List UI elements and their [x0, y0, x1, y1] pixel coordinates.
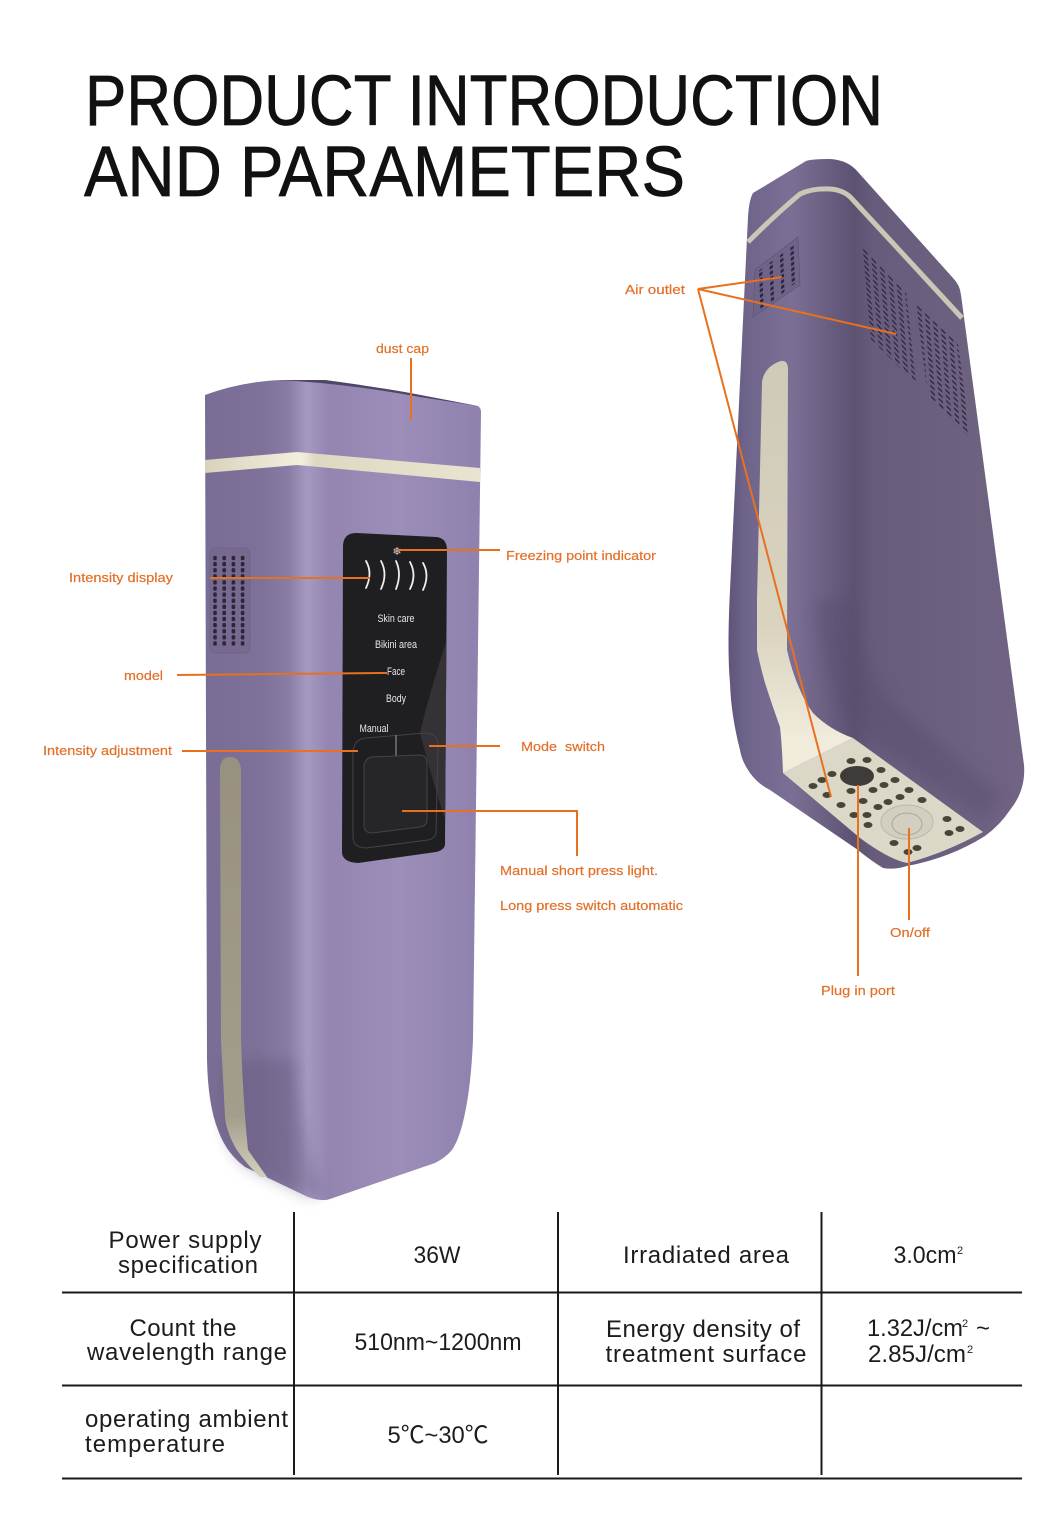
- parameter table: [62, 1212, 1022, 1478]
- title: PRODUCT INTRODUCTION: [85, 62, 883, 141]
- wavelength: Count the: [130, 1315, 236, 1342]
- callout: manual press: [402, 811, 684, 913]
- callout: manual press: Manual short press light.: [500, 863, 658, 878]
- energy value: 1.32J/cm: [867, 1315, 963, 1342]
- callout: freezing point indicator: Freezing point indicator: [506, 548, 657, 563]
- callout: plug in port: Plug in port: [821, 983, 895, 998]
- energy value: [867, 1315, 990, 1368]
- plug port: [840, 766, 874, 786]
- callout: intensity adjustment: Intensity adjustment: [43, 743, 172, 758]
- energy value: 2.85J/cm: [868, 1341, 966, 1368]
- mode labels: [360, 613, 418, 735]
- power button: [881, 805, 933, 839]
- callout: on/off: [890, 828, 930, 940]
- mode labels: Face: [387, 666, 405, 678]
- power supply: specification: [118, 1252, 258, 1279]
- device body: [728, 159, 1024, 869]
- vents: [753, 237, 970, 438]
- intensity arcs: [366, 561, 426, 590]
- buttons: [353, 733, 438, 848]
- title: AND PARAMETERS: [84, 133, 685, 212]
- callouts: front view: [43, 341, 684, 913]
- energy density: treatment surface: [606, 1341, 806, 1368]
- irradiated area: Irradiated area: [623, 1242, 790, 1269]
- title: [84, 62, 883, 212]
- energy density: Energy density of: [606, 1316, 800, 1343]
- freeze icon: ❄: [392, 546, 402, 558]
- wavelength value: 510nm~1200nm: [354, 1329, 522, 1356]
- energy value: 2: [967, 1344, 973, 1356]
- device body: [205, 380, 481, 1200]
- ambient temperature: [85, 1406, 288, 1458]
- temperature value: 5℃~30℃: [388, 1422, 488, 1449]
- energy density: [606, 1316, 806, 1368]
- cream band: [748, 189, 962, 318]
- energy value: ~: [976, 1315, 990, 1342]
- panel gloss: [420, 642, 446, 820]
- 3.0cm2: 2: [957, 1245, 963, 1257]
- callout: manual press: Long press switch automatic: [500, 898, 684, 913]
- mode labels: Body: [386, 693, 406, 705]
- mode labels: Skin care: [378, 613, 414, 625]
- callout: air outlet: [625, 277, 896, 797]
- mode labels: Bikini area: [375, 639, 418, 651]
- dust cap edge: [280, 380, 478, 406]
- plate holes: [808, 757, 964, 855]
- callout: mode switch: Mode switch: [521, 739, 605, 754]
- energy value: 2: [962, 1318, 968, 1330]
- fold shading: [815, 600, 1000, 820]
- callout: dust cap: dust cap: [376, 341, 429, 356]
- table grid: [62, 1212, 1022, 1478]
- callout: on/off: On/off: [890, 925, 930, 940]
- power supply: [108, 1227, 262, 1279]
- ambient temperature: operating ambient: [85, 1406, 288, 1433]
- wavelength: [86, 1315, 287, 1366]
- bottom plate: [783, 738, 983, 863]
- device: front view: [205, 380, 481, 1200]
- side vent: [210, 548, 250, 653]
- side strip: [757, 361, 853, 773]
- callout: model: model: [124, 668, 163, 683]
- cream band: [205, 452, 480, 482]
- callout: dust cap: [376, 341, 429, 420]
- control panel: [342, 533, 450, 863]
- lower left shading: [222, 1060, 322, 1197]
- 3.0cm2: 3.0cm: [894, 1242, 956, 1269]
- device: rear view: [728, 159, 1024, 869]
- callout: intensity display: Intensity display: [69, 570, 174, 585]
- callout: air outlet: Air outlet: [625, 282, 685, 297]
- side strip: [220, 757, 267, 1177]
- 36W: 36W: [414, 1242, 461, 1269]
- ambient temperature: temperature: [85, 1431, 225, 1458]
- mode labels: Manual: [360, 723, 388, 735]
- wavelength: wavelength range: [86, 1339, 287, 1366]
- callouts: rear view: [625, 277, 930, 998]
- power supply: Power supply: [108, 1227, 262, 1254]
